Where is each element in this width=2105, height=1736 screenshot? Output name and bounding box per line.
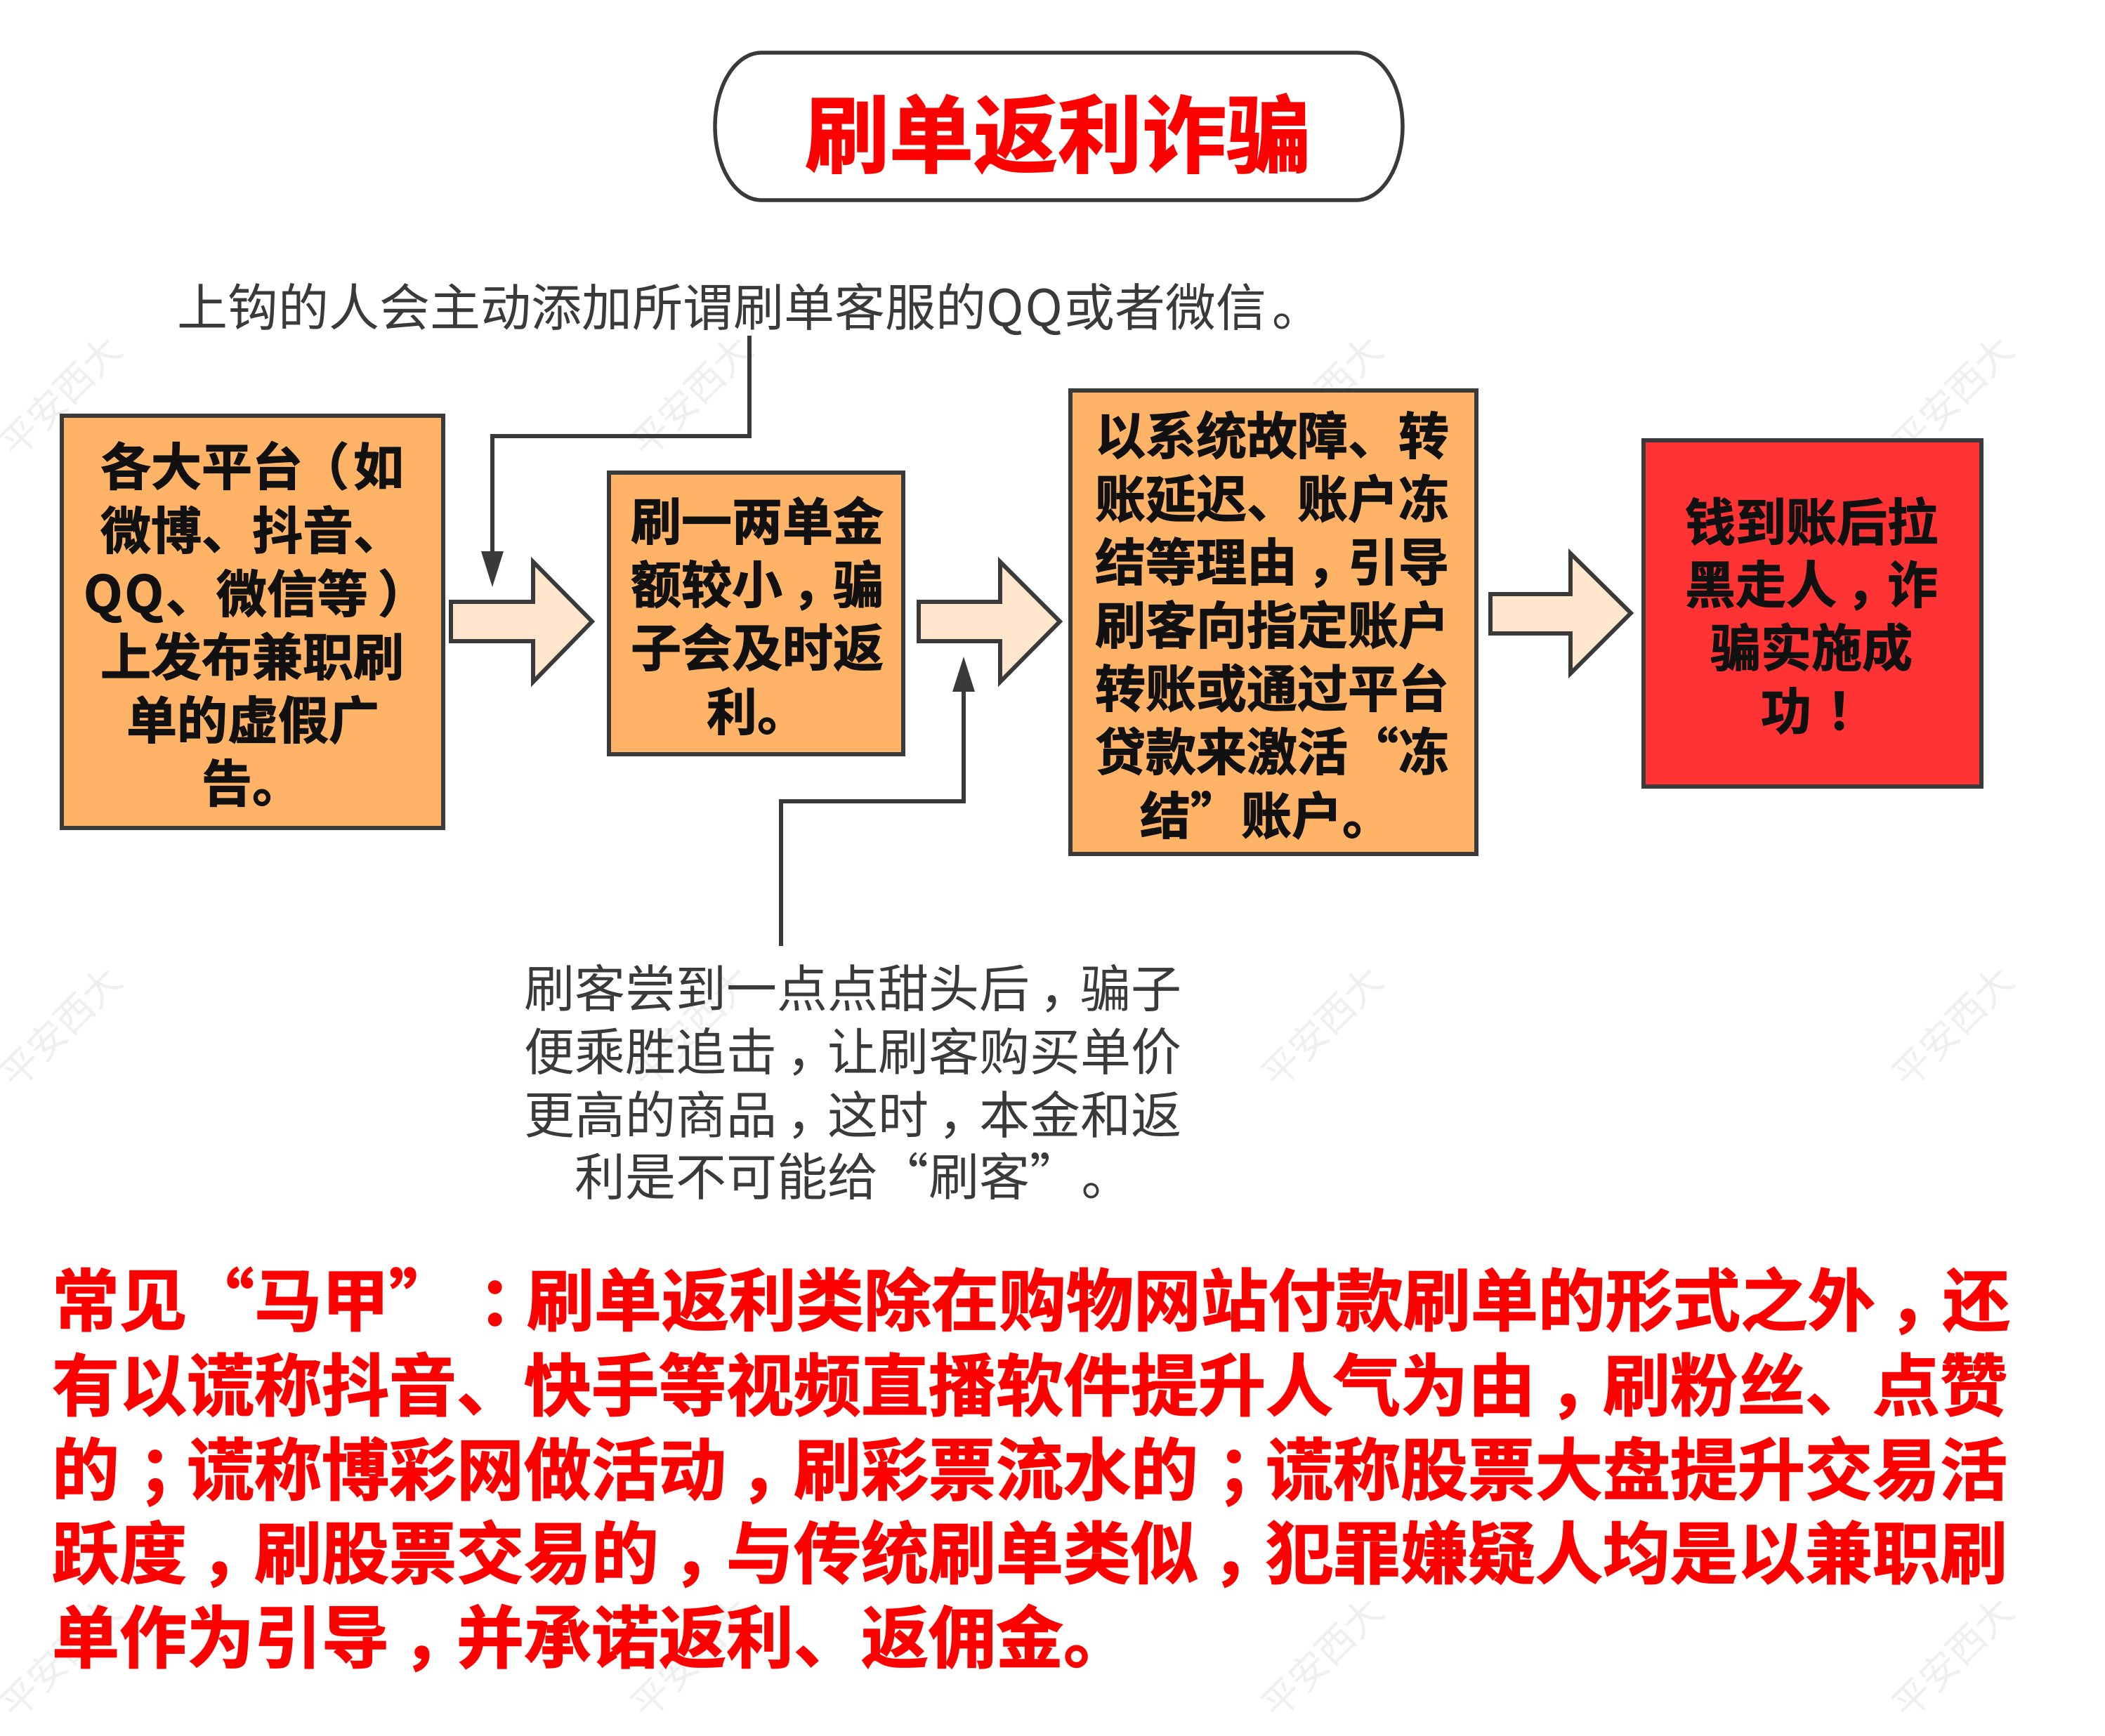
panel: step 1: 各大平台（如 bbox=[100, 426, 404, 500]
watermark pattern: 平安西大 bbox=[616, 952, 763, 1098]
watermark pattern: 平安西大 bbox=[1247, 952, 1394, 1098]
title text: 刷单返利诈骗 bbox=[805, 68, 1311, 190]
panel: step 1: QQ、微信等） bbox=[84, 553, 428, 627]
watermark pattern: 平安西大 bbox=[1247, 321, 1394, 468]
panel: step 2: 额较小，骗 bbox=[631, 544, 884, 618]
warning paragraph bbox=[52, 1247, 2010, 1682]
panel: step 3: 贷款来激活“冻 bbox=[1095, 711, 1449, 785]
bottom caption: 利是不可能给“刷客” 。 bbox=[575, 1136, 1132, 1210]
panel: step 1: 微博、抖音、 bbox=[100, 490, 404, 564]
panel: step 1: 上发布兼职刷 bbox=[100, 617, 404, 690]
panel: step 3: 转账或通过平台 bbox=[1095, 648, 1449, 722]
bottom caption: 便乘胜追击，让刷客购买单价 bbox=[524, 1011, 1181, 1085]
panel: step 3: 结等理由，引导 bbox=[1095, 522, 1449, 596]
watermark pattern: 平安西大 bbox=[1247, 1582, 1394, 1729]
panel: step 1: 告。 bbox=[202, 743, 303, 817]
panel: step 3: 结”账户。 bbox=[1140, 775, 1393, 849]
panel: step 4 bbox=[1644, 440, 1981, 787]
connector arrow: top caption to step 2 bbox=[481, 336, 749, 587]
panel: step 4: 钱到账后拉 bbox=[1685, 482, 1938, 555]
watermark pattern: 平安西大 bbox=[1877, 952, 2024, 1098]
title pill bbox=[715, 53, 1403, 200]
connector arrow: bottom caption to step 3 bbox=[781, 657, 975, 946]
panel: step 2: 刷一两单金 bbox=[631, 481, 884, 555]
panel: step 4: 黑走人，诈 bbox=[1685, 544, 1938, 618]
panel: step 2 bbox=[609, 473, 903, 754]
block arrow 2 bbox=[919, 562, 1060, 682]
watermark pattern: 平安西大 bbox=[616, 321, 763, 468]
watermark pattern: 平安西大 bbox=[1877, 1582, 2024, 1729]
block arrow 3 bbox=[1490, 553, 1631, 673]
panel: step 4: 骗实施成 bbox=[1710, 607, 1913, 681]
panel: step 1: 单的虚假广 bbox=[126, 680, 379, 754]
panel: step 2: 利。 bbox=[707, 671, 808, 745]
watermark pattern: 平安西大 bbox=[1877, 321, 2024, 468]
bottom caption bbox=[524, 948, 1181, 1210]
warning paragraph: 的 ；谎称博彩网做活动，刷彩票流水的 ；谎称股票大盘提升交易活 bbox=[52, 1416, 2007, 1514]
panel: step 3 bbox=[1070, 390, 1476, 854]
bottom caption: 刷客尝到一点点甜头后，骗子 bbox=[524, 948, 1181, 1022]
block arrow 1 bbox=[451, 562, 592, 682]
panel: step 3: 账延迟、账户冻 bbox=[1095, 459, 1449, 532]
panel: step 3: 刷客向指定账户 bbox=[1095, 585, 1449, 659]
panel: step 3: 以系统故障、转 bbox=[1095, 395, 1449, 469]
bottom caption: 更高的商品，这时，本金和返 bbox=[524, 1074, 1181, 1148]
panel: step 2: 子会及时返 bbox=[631, 607, 884, 681]
watermark pattern bbox=[0, 321, 2024, 1729]
watermark pattern: 平安西大 bbox=[616, 1582, 763, 1729]
warning paragraph: 跃度，刷股票交易的，与传统刷单类似，犯罪嫌疑人均是以兼职刷 bbox=[52, 1500, 2007, 1598]
panel: step 4: 功 ！ bbox=[1761, 671, 1877, 744]
panel: step 1 bbox=[62, 416, 443, 828]
top caption: 上钩的人会主动添加所谓刷单客服的QQ或者微信。 bbox=[177, 267, 1323, 341]
warning paragraph: 单作为引导，并承诺返利、返佣金。 bbox=[52, 1584, 1131, 1682]
warning paragraph: 有以谎称抖音、快手等视频直播软件提升人气为由，刷粉丝、点赞 bbox=[52, 1332, 2007, 1430]
warning paragraph: 常见“马甲” ：刷单返利类除在购物网站付款刷单的形式之外，还 bbox=[52, 1247, 2010, 1345]
